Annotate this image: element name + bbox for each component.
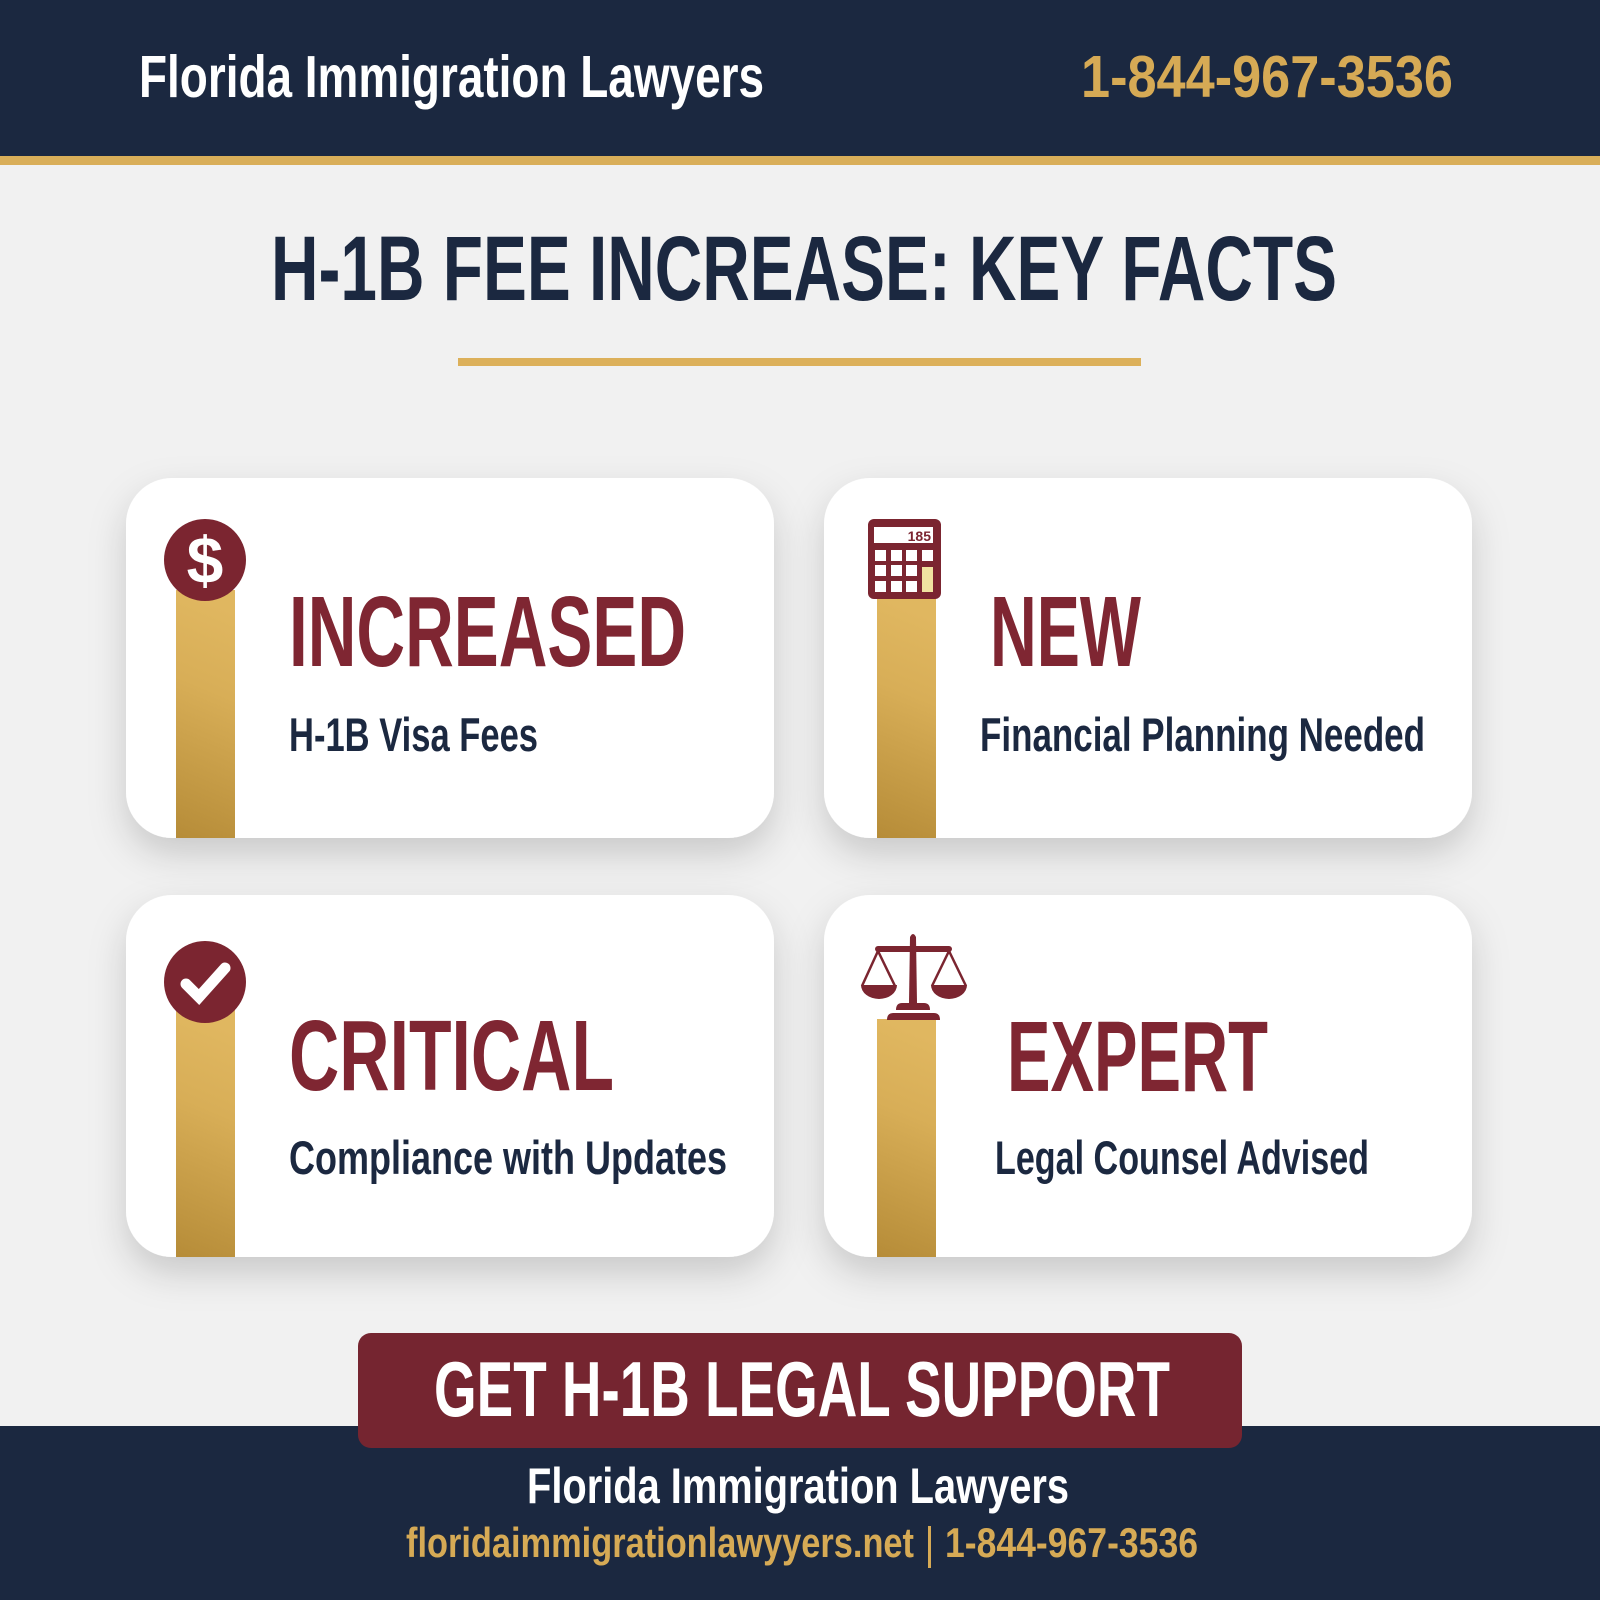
footer firm name: Florida Immigration Lawyers bbox=[527, 1458, 1069, 1514]
heading: CRITICAL bbox=[289, 1000, 614, 1112]
subtext: Compliance with Updates bbox=[289, 1131, 727, 1184]
panel: critical bbox=[126, 895, 774, 1257]
subtext: H-1B Visa Fees bbox=[289, 708, 538, 761]
gold bar bbox=[176, 590, 235, 838]
gold bar bbox=[877, 1019, 936, 1257]
heading: EXPERT bbox=[1007, 1001, 1268, 1113]
heading: NEW bbox=[990, 576, 1141, 688]
icon: check circle bbox=[164, 941, 246, 1023]
call to action button: GET H-1B LEGAL SUPPORT bbox=[434, 1345, 1170, 1433]
icon: calculator: 185 bbox=[908, 528, 931, 544]
panel: increased bbox=[126, 478, 774, 838]
icon: dollar coin bbox=[164, 519, 246, 601]
icon: scales of justice bbox=[861, 934, 967, 1020]
heading: INCREASED bbox=[289, 576, 686, 688]
title underline bbox=[458, 358, 1141, 366]
footer band bbox=[0, 1426, 1600, 1600]
icon: dollar coin: $ bbox=[187, 523, 223, 597]
panel: expert bbox=[824, 895, 1472, 1257]
gold bar bbox=[176, 1010, 235, 1257]
header phone number: 1-844-967-3536 bbox=[1081, 44, 1453, 110]
header band bbox=[0, 0, 1600, 165]
gold bar bbox=[877, 598, 936, 838]
panel: new bbox=[824, 478, 1472, 838]
footer website: floridaimmigrationlawyyers.net bbox=[406, 1519, 914, 1566]
call to action button bbox=[358, 1333, 1242, 1448]
header firm name: Florida Immigration Lawyers bbox=[139, 44, 764, 110]
subtext: Financial Planning Needed bbox=[980, 708, 1425, 761]
subtext: Legal Counsel Advised bbox=[995, 1131, 1369, 1184]
footer phone number: 1-844-967-3536 bbox=[945, 1519, 1198, 1566]
footer separator bbox=[928, 1526, 931, 1568]
icon: calculator bbox=[868, 519, 941, 599]
